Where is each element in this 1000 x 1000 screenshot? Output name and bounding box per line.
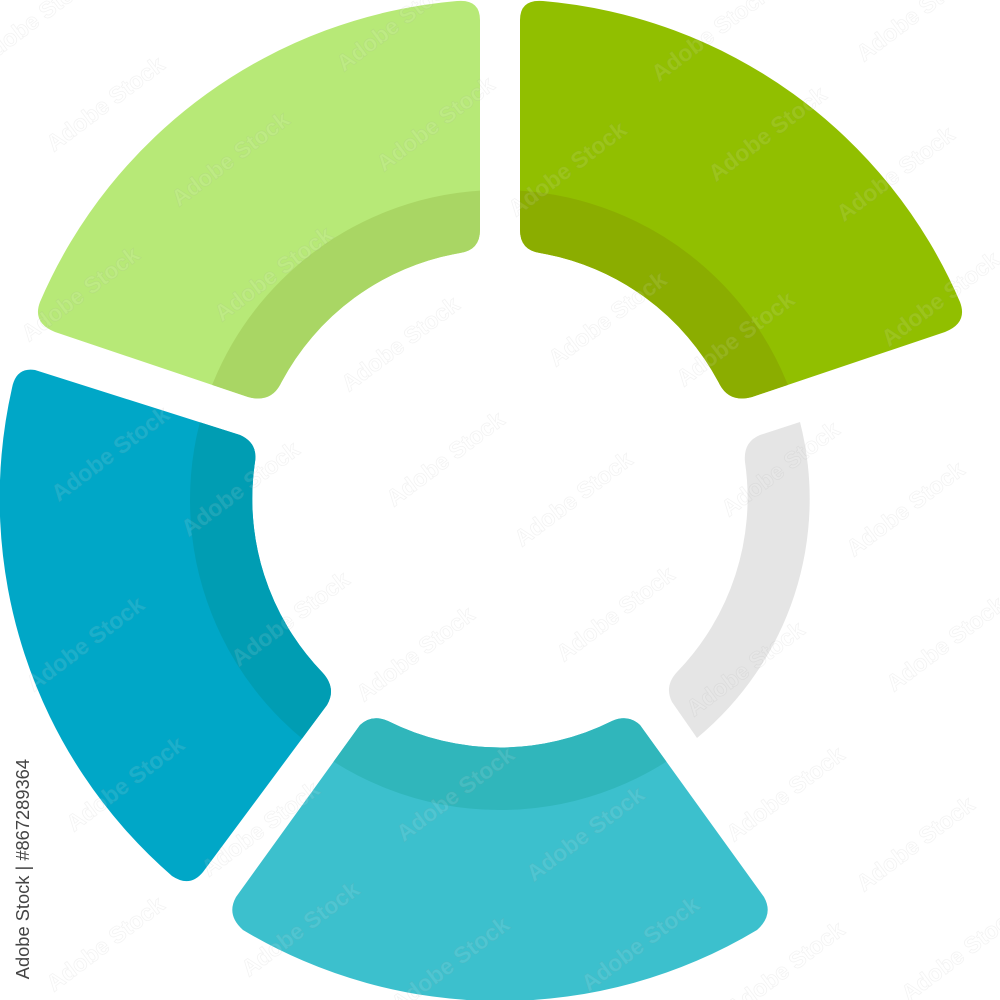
segment: light green, top left: [38, 0, 480, 398]
watermark pattern: Adobe Stock: [336, 291, 464, 396]
segment: blue, left: [0, 370, 331, 882]
watermark pattern: Adobe Stock: [41, 51, 169, 156]
watermark pattern: Adobe Stock: [551, 561, 679, 666]
watermark pattern: Adobe Stock: [226, 566, 354, 671]
segment: dark green, top right: [520, 0, 962, 398]
segment: grey, right remainder: [669, 422, 810, 738]
watermark pattern: Adobe Stock: [16, 241, 144, 346]
watermark pattern: Adobe Stock: [509, 446, 637, 551]
watermark pattern: Adobe Stock: [196, 776, 324, 881]
watermark pattern: Adobe Stock: [681, 616, 809, 721]
watermark pattern: Adobe Stock: [576, 891, 704, 996]
watermark pattern: Adobe Stock: [61, 731, 189, 836]
watermark pattern: Adobe Stock: [831, 121, 959, 226]
segment: teal, bottom: [232, 718, 768, 1000]
watermark pattern: Adobe Stock: [851, 791, 979, 896]
watermark pattern: Adobe Stock: [46, 401, 174, 506]
watermark pattern: Adobe Stock: [716, 416, 844, 521]
watermark pattern: Adobe Stock: [166, 106, 294, 211]
watermark pattern: Adobe Stock: [503, 116, 631, 221]
watermark pattern: Adobe Stock: [721, 741, 849, 846]
watermark pattern: Adobe Stock: [21, 591, 149, 696]
watermark pattern: Adobe Stock: [176, 436, 304, 541]
watermark pattern: Adobe Stock: [236, 876, 364, 981]
watermark pattern: Adobe Stock: [521, 781, 649, 886]
watermark pattern: Adobe Stock: [841, 456, 969, 561]
watermark pattern: Adobe Stock: [209, 221, 337, 326]
watermark pattern: Adobe Stock: [671, 286, 799, 391]
watermark pattern: Adobe Stock: [41, 891, 169, 996]
watermark pattern: Adobe Stock: [351, 601, 479, 706]
watermark pattern: Adobe Stock: [543, 266, 671, 371]
watermark pattern: Adobe Stock: [703, 81, 831, 186]
watermark pattern: Adobe Stock: [381, 406, 509, 511]
watermark pattern: Adobe Stock: [371, 71, 499, 176]
watermark pattern: Adobe Stock: [391, 741, 519, 846]
stock id label: Adobe Stock | #867289364: [12, 759, 33, 979]
